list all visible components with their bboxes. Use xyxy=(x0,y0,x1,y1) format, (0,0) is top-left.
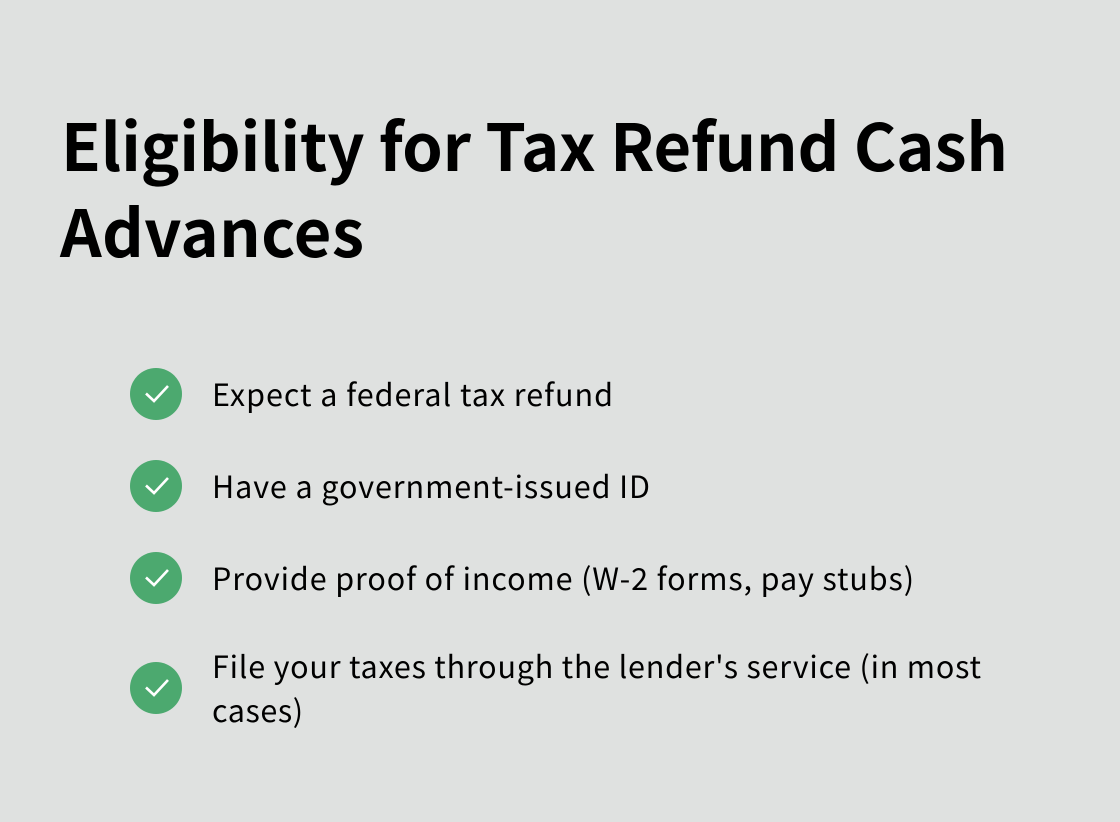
item: proof of income: Provide proof of income (W-2 forms, pay stubs) xyxy=(212,555,914,599)
checklist xyxy=(130,368,982,731)
item: government ID: Have a government-issued ID xyxy=(212,463,650,507)
item: file through lender xyxy=(130,643,982,731)
title: Eligibility for Tax Refund Cash xyxy=(61,96,1008,190)
item: file through lender: File your taxes through the lender's service (in most xyxy=(212,643,982,687)
item: federal tax refund: Expect a federal tax refund xyxy=(212,371,613,415)
title xyxy=(59,96,1008,276)
item: file through lender: cases) xyxy=(212,687,303,731)
title: Advances xyxy=(59,182,364,276)
